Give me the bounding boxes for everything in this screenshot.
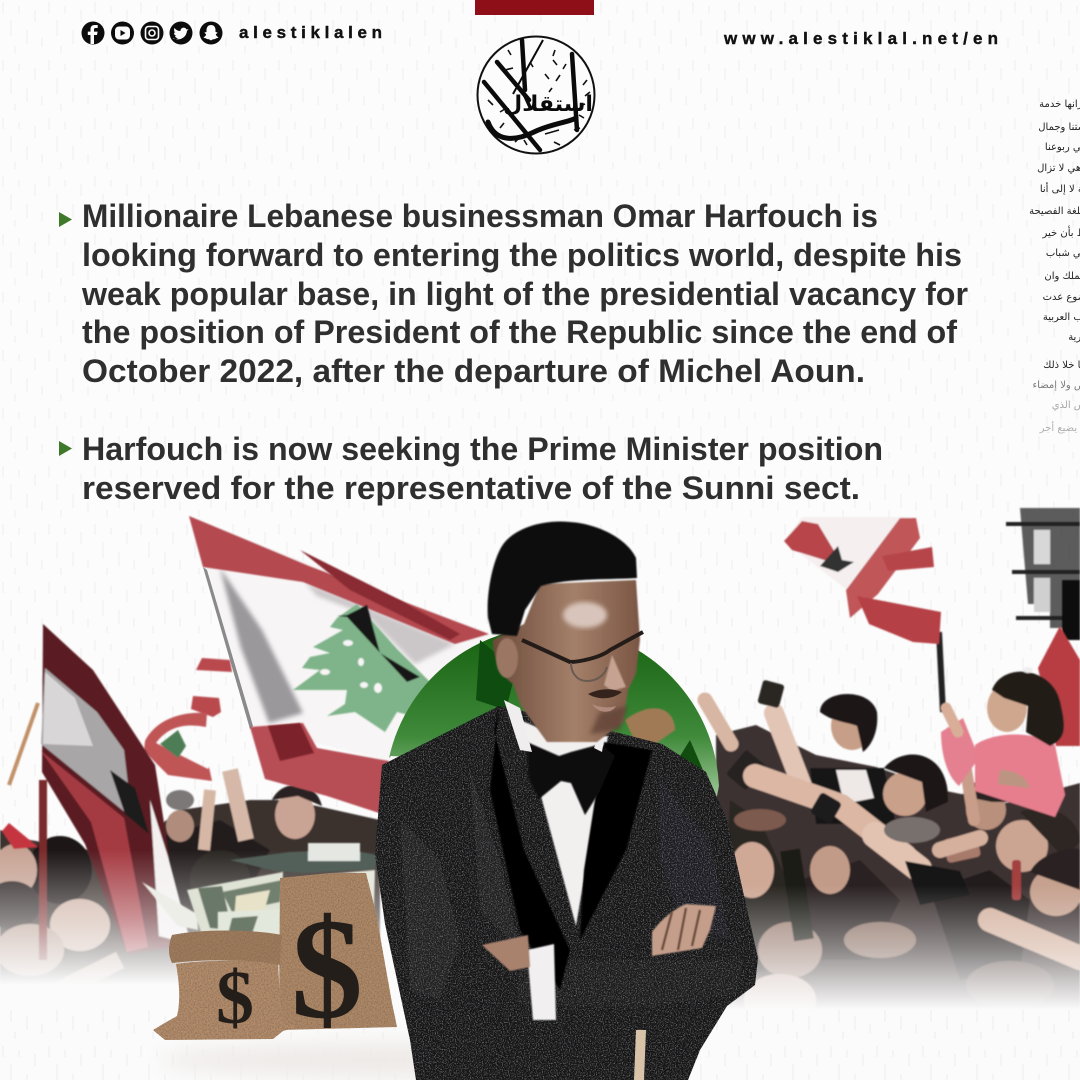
bottom fade right (400, 885, 1080, 1010)
logo emblem (478, 36, 594, 154)
arabic newspaper fragment (1029, 99, 1080, 434)
shirt (520, 720, 608, 926)
website url: www.alestiklal.net/en (723, 29, 998, 48)
bullet paragraph 1: the position of President of the Republic since the end of (82, 314, 957, 350)
cuff and hands (527, 944, 556, 1020)
top red tab (475, 0, 594, 15)
left flag (9, 624, 191, 960)
social handle: alestiklalen (239, 23, 382, 42)
lapels (490, 706, 652, 990)
big bag (279, 873, 397, 1030)
logo emblem: استقلال (503, 92, 593, 117)
cedar tree (293, 604, 447, 732)
girl (941, 718, 979, 786)
collar (504, 700, 604, 752)
right men (996, 820, 1048, 872)
jacket (375, 706, 758, 1080)
neck and face (493, 580, 640, 742)
small bag (153, 930, 297, 1040)
man in centre (883, 772, 927, 816)
building silhouette (1006, 508, 1080, 640)
long arm (755, 776, 905, 856)
left small waving flag (144, 658, 232, 781)
money bags (142, 843, 397, 1049)
hair (488, 522, 637, 636)
left crowd photo (0, 770, 380, 1010)
dollar signs: $ (291, 890, 363, 1049)
green circle (389, 627, 719, 826)
hands (966, 770, 974, 820)
bullet paragraph 2 (59, 431, 883, 506)
bottom whitening band (0, 985, 1080, 1080)
glasses (522, 632, 643, 662)
right red flag behind girl (1038, 626, 1080, 746)
bow tie (527, 742, 615, 815)
bottom fade left (0, 850, 400, 985)
cash pile (142, 843, 377, 936)
bullet paragraph 1: looking forward to entering the politics world, despite his (82, 237, 962, 273)
boy (810, 768, 896, 824)
bullet paragraph 1: weak popular base, in light of the presidential vacancy for (81, 276, 968, 312)
bullet paragraph 1: Millionaire Lebanese businessman Omar Harfouch is (82, 198, 878, 234)
bullet paragraph 2: reserved for the representative of the Sunni sect. (82, 470, 860, 506)
bullet paragraph 2: Harfouch is now seeking the Prime Minister position (82, 431, 883, 467)
bullet paragraph 1: October 2022, after the departure of Michel Aoun. (82, 353, 865, 389)
portrait of man (375, 522, 758, 1080)
money bags: $ (216, 956, 254, 1040)
bullet paragraph 1 (59, 198, 968, 389)
social media icons (82, 22, 222, 44)
right crowd photo (705, 667, 1080, 1045)
main lebanese flag (189, 516, 513, 813)
top right waving flag (784, 517, 943, 712)
